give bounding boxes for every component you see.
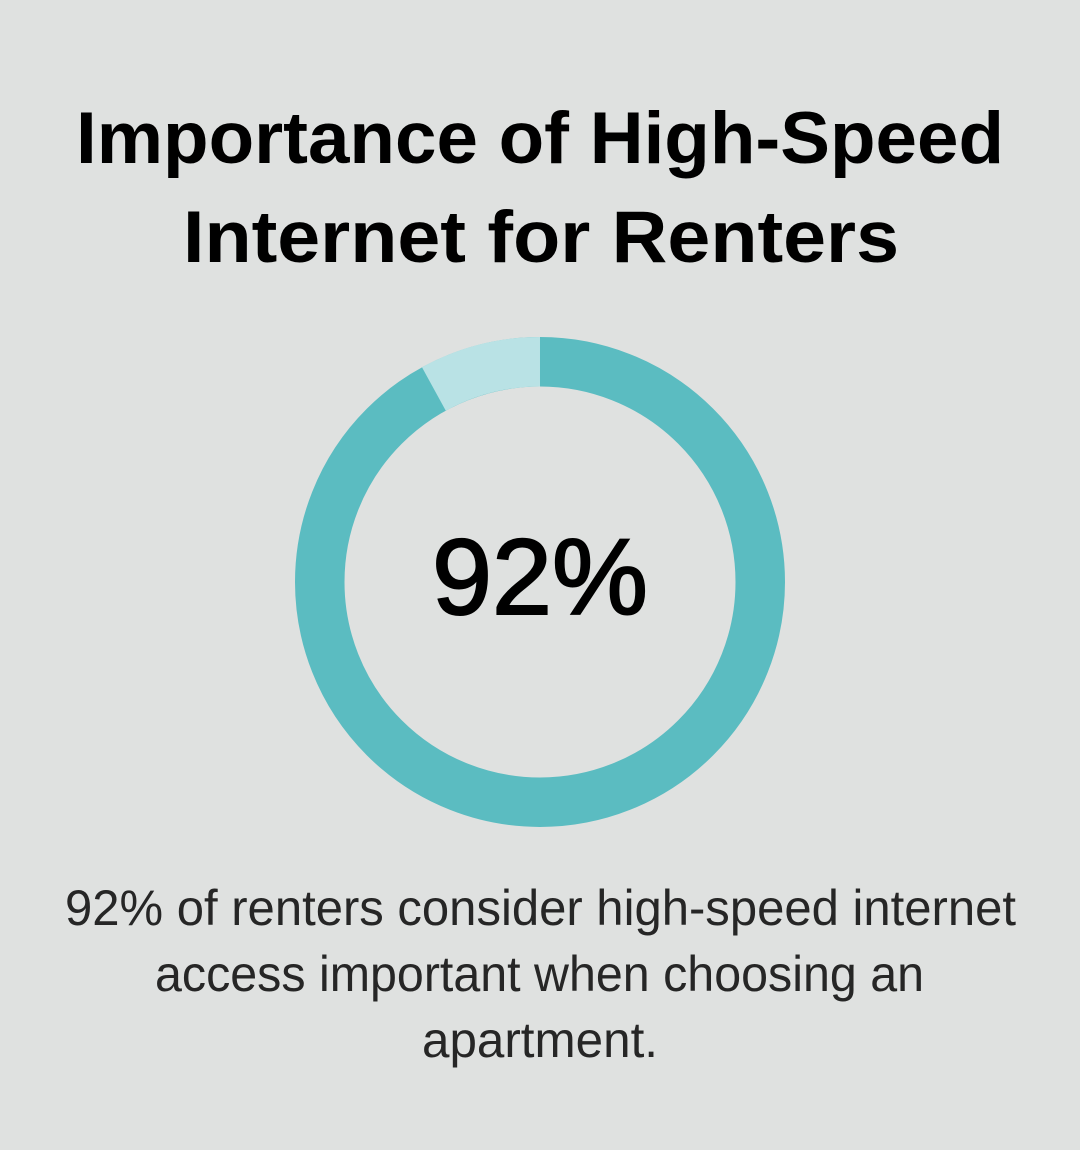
description text bbox=[65, 880, 1016, 1068]
title bbox=[76, 98, 1004, 278]
description text: 92% of renters consider high-speed internet bbox=[65, 880, 1016, 936]
donut chart: 92% bbox=[320, 362, 760, 802]
title: Internet for Renters bbox=[183, 197, 899, 278]
description text: access important when choosing an bbox=[155, 946, 924, 1002]
description text: apartment. bbox=[422, 1012, 658, 1068]
title: Importance of High-Speed bbox=[76, 98, 1004, 179]
center value: 92% bbox=[432, 516, 648, 637]
